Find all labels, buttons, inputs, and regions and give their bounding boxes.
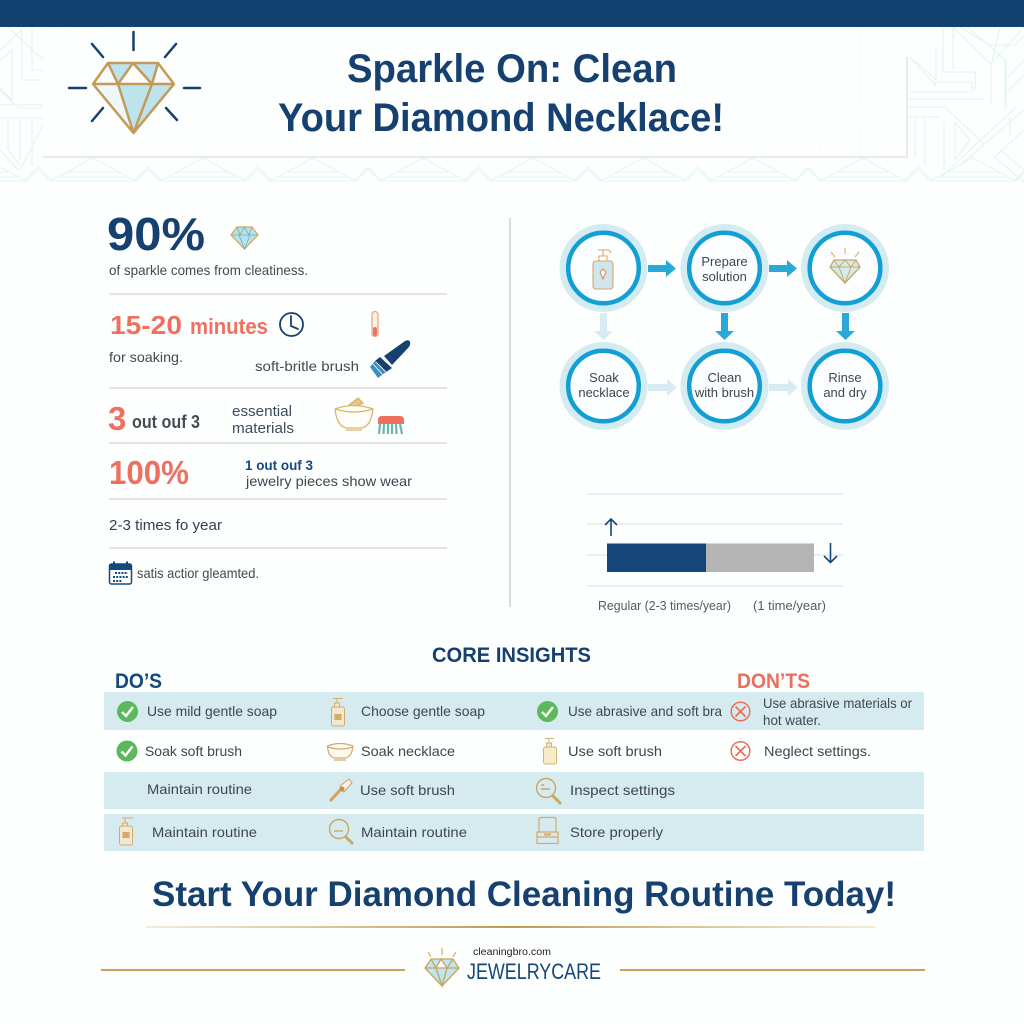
row text: Store properly	[570, 824, 663, 840]
step labels: Prepare	[701, 254, 748, 269]
stat: 100 percent: 100%	[109, 454, 189, 491]
step: bottle icon	[593, 250, 613, 289]
step labels: solution	[702, 269, 747, 284]
table: do and don't rows	[104, 692, 924, 851]
brand url: cleaningbro.com	[473, 947, 551, 958]
stat: 3 out of 3	[108, 400, 294, 437]
stat: 3 out of 3: materials	[232, 420, 294, 437]
title text	[278, 47, 724, 140]
stat: 3 out of 3: essential	[232, 403, 292, 420]
step: diamond icon	[830, 248, 860, 283]
stat: brush label: soft-britle brush	[255, 358, 359, 374]
title panel	[43, 47, 907, 157]
arrow: up	[605, 519, 617, 536]
bar chart: cleaning frequency	[587, 494, 843, 613]
stat: soaking time: minutes	[190, 314, 268, 339]
heading: donts: DON’TS	[737, 670, 810, 693]
top navy bar	[0, 0, 1024, 27]
stat: 3 out of 3: out ouf 3	[132, 412, 200, 432]
flow diagram	[560, 224, 889, 430]
icon: bottle row 1	[332, 698, 344, 726]
row text: Use abrasive and soft bra	[568, 703, 722, 719]
icon: bowl row 2	[328, 744, 353, 760]
stat: 100 percent: 1 out ouf 3	[245, 457, 313, 473]
stat: soaking time	[109, 310, 268, 365]
row text: hot water.	[763, 712, 821, 728]
row text: Use soft brush	[568, 743, 662, 759]
step labels: Soak	[589, 370, 619, 385]
step labels: with brush	[694, 385, 754, 400]
icon: small diamond	[231, 227, 258, 249]
footer logo	[101, 947, 925, 986]
row text: Maintain routine	[147, 781, 252, 797]
icon: clock	[280, 313, 303, 336]
row text: Soak necklace	[361, 743, 455, 759]
icon: thermometer	[372, 312, 378, 336]
arrows: faded	[594, 313, 798, 396]
bar: regular	[607, 544, 706, 572]
row text: Use mild gentle soap	[147, 703, 277, 719]
row text: Use abrasive materials or	[763, 695, 912, 711]
arrow: down	[824, 543, 837, 562]
icon: bottle row 4	[120, 818, 133, 845]
heading: dos: DO’S	[115, 670, 162, 693]
stat: 3 out of 3: 3	[108, 400, 126, 437]
call to action: Start Your Diamond Cleaning Routine Today!	[152, 875, 896, 914]
icons: red crosses	[731, 702, 750, 760]
stat: 100 percent: jewelry pieces show wear	[245, 473, 412, 489]
brand name: JEWELRYCARE	[467, 959, 601, 984]
stat: 100 percent	[109, 454, 412, 491]
icon: bottle row 2	[544, 738, 556, 764]
step labels: Rinse	[828, 370, 862, 385]
icon: brush	[370, 340, 410, 378]
axis labels: (1 time/year)	[753, 599, 826, 613]
stat: soaking time: 15-20	[110, 310, 182, 340]
title text: Your Diamond Necklace!	[278, 96, 724, 140]
step labels	[578, 254, 867, 400]
icon: magnifier settings	[536, 778, 560, 803]
step circles	[560, 224, 889, 430]
row text: Maintain routine	[361, 824, 467, 840]
stat: 90 percent	[107, 208, 308, 278]
axis labels: Regular (2-3 times/year)	[598, 599, 731, 613]
header pattern band	[0, 27, 1024, 182]
step labels: necklace	[578, 385, 630, 400]
icon: footer diamond	[425, 948, 459, 986]
stat: 90 percent: of sparkle comes from cleatiness.	[109, 262, 308, 278]
step labels: Clean	[708, 370, 741, 385]
icon: scrub brush	[378, 416, 404, 434]
heading: core insights: CORE INSIGHTS	[432, 644, 591, 667]
arrows: strong	[648, 260, 855, 340]
title text: Sparkle On: Clean	[347, 47, 677, 91]
row text: Neglect settings.	[764, 743, 871, 759]
row text	[145, 695, 912, 840]
row text: Maintain routine	[152, 824, 257, 840]
step labels: and dry	[823, 385, 867, 400]
row text: Choose gentle soap	[361, 703, 485, 719]
stat: 90 percent: 90%	[107, 208, 205, 260]
panel: key statistics	[107, 208, 447, 584]
icon: calendar	[110, 562, 132, 584]
stat: soaking time: for soaking.	[109, 349, 183, 365]
axis labels	[598, 599, 826, 613]
bar: occasional	[706, 544, 814, 572]
stat: satisfaction: satis actior gleamted.	[137, 565, 259, 581]
row text: Soak soft brush	[145, 743, 242, 759]
stat: frequency: 2-3 times fo year	[109, 517, 222, 534]
row text: Inspect settings	[570, 782, 675, 798]
row text: Use soft brush	[360, 782, 455, 798]
icons: green checks	[116, 701, 558, 762]
icon: magnifier row 4	[330, 820, 352, 843]
icon: bowl	[335, 398, 373, 430]
icon: brush row 3	[331, 779, 352, 800]
icon: jewelry box	[537, 818, 558, 844]
icon: header diamond	[69, 32, 200, 133]
